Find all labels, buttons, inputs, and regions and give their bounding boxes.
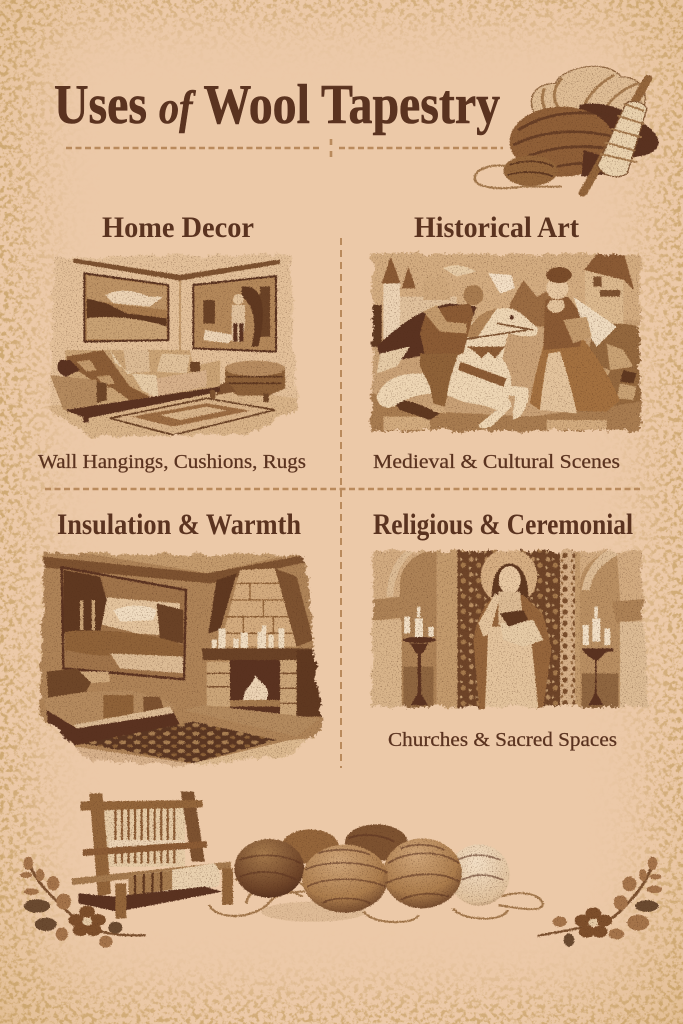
icon: loom <box>72 792 233 918</box>
ceiling <box>80 551 285 573</box>
caption: home decor: Wall Hangings, Cushions, Rugs <box>38 452 306 473</box>
ground <box>368 392 643 434</box>
heading: Home Decor: Home Decor <box>102 211 254 244</box>
bottom scene: loom and yarn balls <box>72 792 542 922</box>
panel: religious illustration <box>363 543 653 718</box>
rug <box>83 722 277 763</box>
sky <box>367 247 647 320</box>
title divider <box>66 139 503 157</box>
heading: Historical Art: Historical Art <box>414 211 579 244</box>
borders <box>437 548 457 710</box>
candles left <box>403 607 436 705</box>
trees mid <box>510 280 557 327</box>
icon: left floral sprig <box>20 857 146 948</box>
candles right <box>582 607 613 705</box>
bushes <box>590 323 642 406</box>
icon: yarn and spindle <box>475 66 659 193</box>
yarn strands <box>209 874 542 922</box>
icon: right floral sprig <box>538 857 662 947</box>
heading: Religious and Ceremonial: Religious & Ceremonial <box>373 508 633 541</box>
horizontal divider <box>45 488 643 490</box>
left arch <box>367 548 437 710</box>
ottoman <box>217 361 285 402</box>
heading: Insulation and Warmth: Insulation & Warmth <box>57 508 301 541</box>
left wall tapestry <box>84 273 168 342</box>
caption: historical art: Medieval & Cultural Scenes <box>373 452 620 473</box>
panel: historical art illustration <box>368 250 643 434</box>
knight <box>377 285 483 413</box>
sofa <box>50 350 220 422</box>
saint figure <box>473 548 552 718</box>
caption: religious: Churches & Sacred Spaces <box>388 730 617 751</box>
wall rail <box>73 258 280 281</box>
castle right <box>584 253 634 327</box>
castle left <box>370 257 457 347</box>
right wall tapestry <box>193 276 276 352</box>
wall tapestry <box>62 567 186 679</box>
yarn balls <box>234 824 510 913</box>
title: Uses of Wool Tapestry <box>54 74 500 136</box>
vertical divider <box>340 238 342 768</box>
panel: insulation illustration <box>36 550 324 768</box>
right arch <box>580 548 653 710</box>
lady <box>530 267 620 413</box>
bench <box>43 668 180 745</box>
horse <box>377 308 538 428</box>
panel: home decor illustration <box>48 252 300 439</box>
rug <box>110 398 275 435</box>
floor <box>48 392 298 439</box>
floral backdrop <box>457 548 560 710</box>
fireplace <box>201 568 322 718</box>
